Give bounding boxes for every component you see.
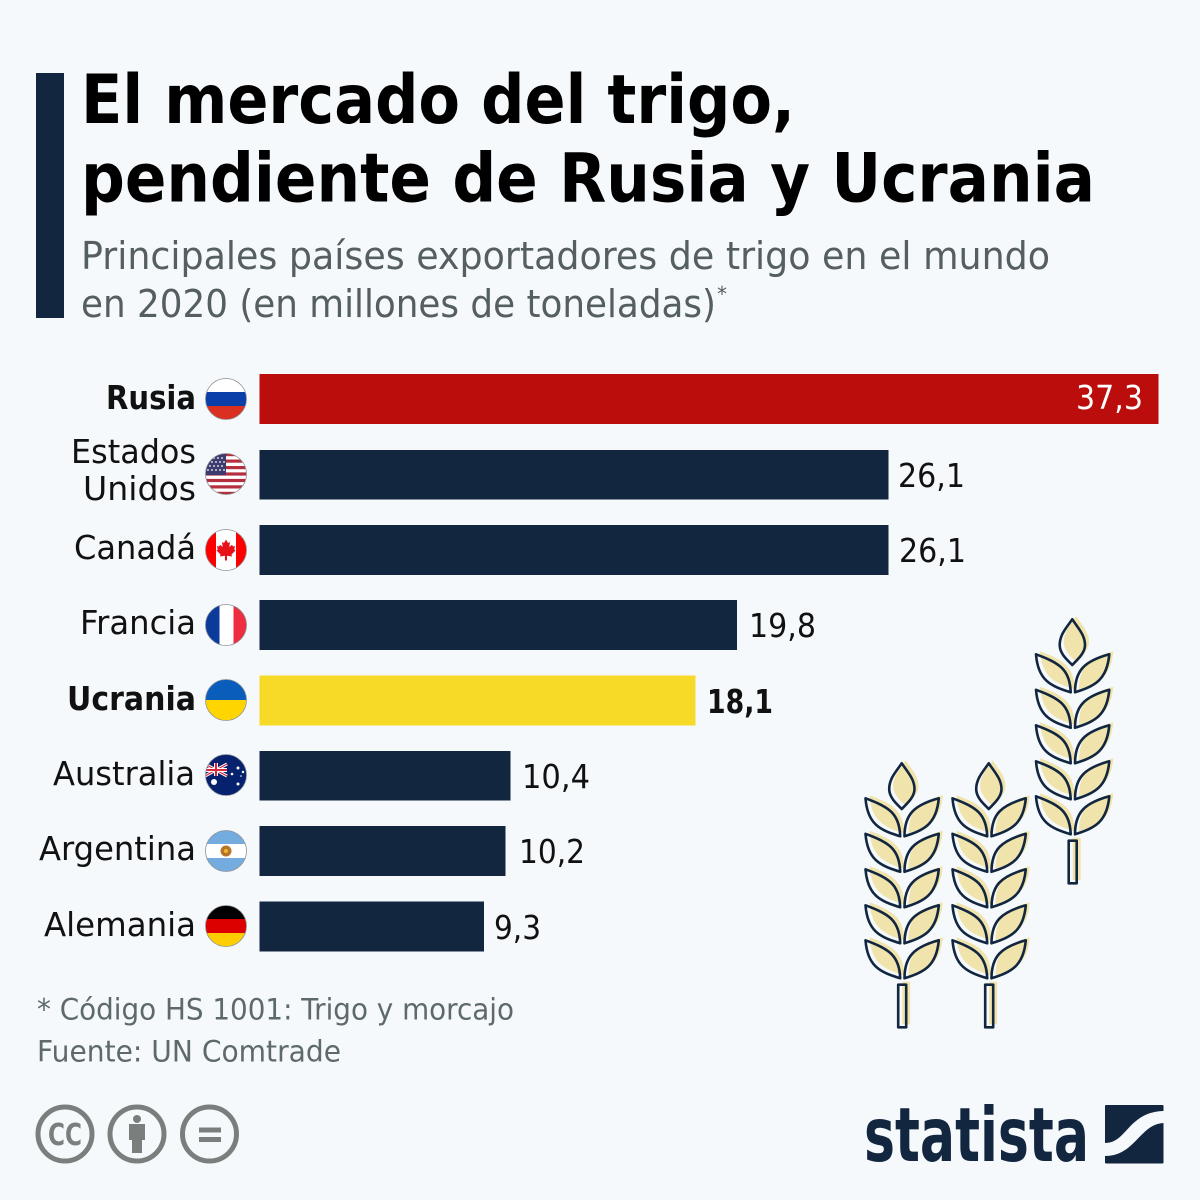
value: Australia: 10,4 (522, 757, 590, 796)
title: pendiente de Rusia y Ucrania (81, 140, 1095, 218)
bar: Argentina (260, 826, 506, 876)
row: Australia (53, 751, 590, 800)
row: Argentina (39, 826, 585, 876)
icon: wheat stalks (866, 616, 1113, 1027)
row: Estados Unidos: Unidos (83, 469, 196, 508)
value: Francia: 19,8 (749, 606, 816, 645)
value: Alemania: 9,3 (494, 908, 541, 947)
icon: flag France (205, 604, 248, 646)
row: Ucrania (67, 676, 773, 726)
row: Ucrania: Ucrania (67, 679, 196, 718)
flag outlines (206, 378, 246, 946)
icon: statista mark (1105, 1105, 1164, 1164)
row: Canadá: Canadá (74, 528, 196, 567)
bar: Canadá (260, 525, 888, 575)
subtitle (81, 234, 1050, 326)
row: Australia: Australia (53, 754, 195, 793)
bar: Rusia (260, 374, 1158, 424)
row: Estados Unidos: Estados (71, 432, 196, 471)
icon: flag USA (205, 453, 247, 495)
subtitle: en 2020 (en millones de toneladas) (81, 282, 716, 326)
title (81, 61, 1095, 218)
icon: no derivatives (182, 1107, 236, 1161)
icon: flag Germany (205, 905, 247, 947)
subtitle: * (717, 282, 727, 306)
icon: attribution (110, 1107, 164, 1161)
statista logo: statista (864, 1091, 1089, 1179)
icon: flag Russia (205, 378, 247, 421)
icon: flag Canada (205, 529, 247, 571)
row: Francia: Francia (80, 603, 196, 642)
value: Estados Unidos: 26,1 (898, 456, 965, 495)
title accent bar (36, 73, 64, 318)
value: Ucrania: 18,1 (707, 682, 773, 721)
subtitle: Principales países exportadores de trigo en el mundo (81, 234, 1050, 278)
footnote and source: * Código HS 1001: Trigo y morcajo (37, 992, 514, 1026)
icon: flag Ukraine (205, 679, 247, 721)
footnote and source (37, 992, 514, 1068)
bar: Alemania (260, 902, 484, 952)
row: Rusia (106, 374, 1158, 424)
bar: Estados Unidos (260, 450, 888, 500)
row: Canadá (74, 525, 966, 575)
row: Rusia: Rusia (106, 378, 196, 417)
row: Estados Unidos (74, 438, 962, 500)
footnote and source: Fuente: UN Comtrade (37, 1034, 341, 1068)
row: Alemania (44, 902, 541, 952)
bar: Francia (260, 600, 737, 650)
title: El mercado del trigo, (81, 61, 795, 140)
row: Francia (80, 600, 816, 650)
row: Argentina: Argentina (39, 829, 196, 868)
icon: cc license: CC (48, 1118, 82, 1153)
row: Alemania: Alemania (44, 905, 196, 944)
value: Argentina: 10,2 (519, 832, 585, 871)
bar: Ucrania (260, 676, 696, 726)
bar: Australia (260, 751, 510, 800)
value: Canadá: 26,1 (899, 531, 966, 570)
icon: flag Australia (205, 754, 247, 796)
icon: flag Argentina (205, 830, 247, 872)
value: Rusia: 37,3 (1076, 378, 1143, 417)
icon: cc license (38, 1107, 92, 1161)
